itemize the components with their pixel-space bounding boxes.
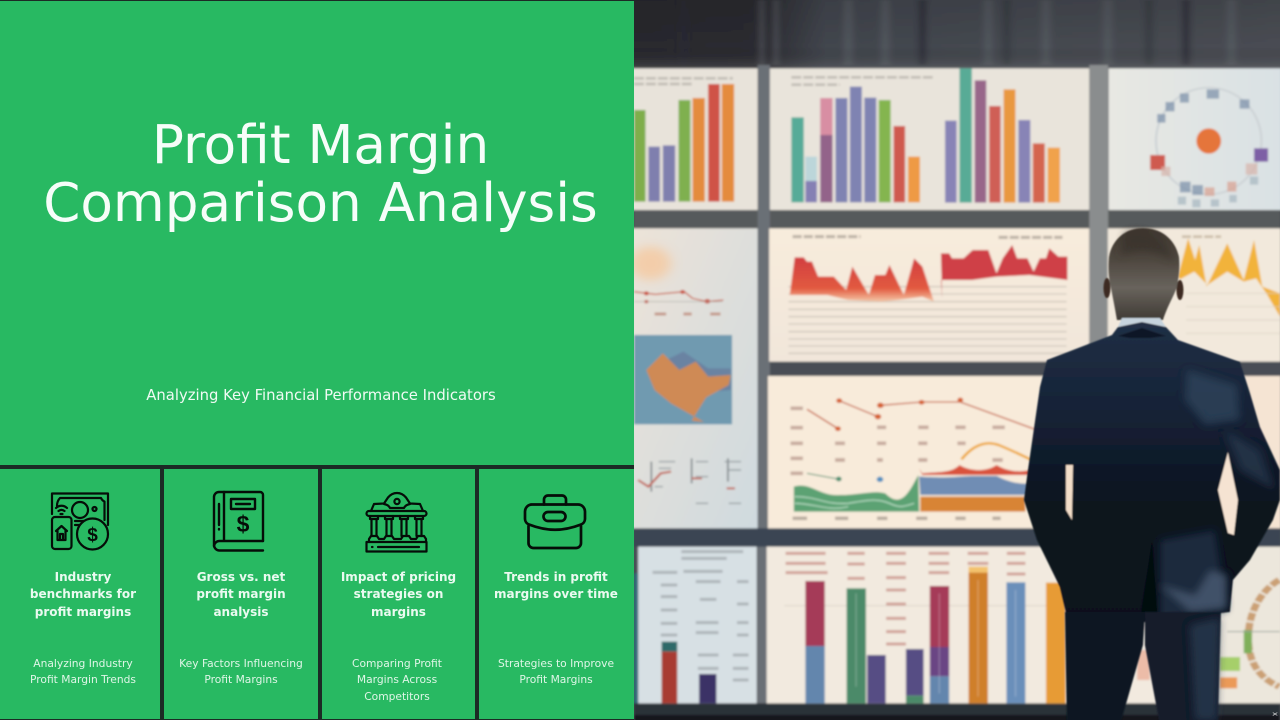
third row line and stacked area chart panel [768, 376, 1089, 528]
card text [179, 657, 303, 686]
panel: title area [0, 0, 634, 720]
ears [1103, 278, 1183, 300]
title: Comparison Analysis [43, 172, 598, 234]
card text: Margins Across [357, 673, 437, 686]
card text: Profit Margins [519, 673, 593, 686]
bottom left table panel [634, 547, 757, 703]
middle centre red area chart panel [769, 228, 1089, 362]
middle right yellow line chart panel [1108, 228, 1280, 362]
collar [1118, 318, 1166, 327]
card heading: analysis [213, 605, 269, 619]
card text: Profit Margin Trends [30, 673, 136, 686]
icon: classical bank building [365, 492, 428, 553]
subtitle: Analyzing Key Financial Performance Indicators [146, 387, 496, 404]
photo: businessman viewing wall of charts [634, 0, 1280, 720]
card text: Key Factors Influencing [179, 657, 303, 670]
card heading [494, 570, 618, 601]
card heading: profit margins [35, 605, 131, 619]
bottom centre bar chart panel [767, 547, 1220, 703]
top right radial chart panel [1109, 68, 1280, 210]
card text: Comparing Profit [352, 657, 442, 670]
wall and panels background [630, 0, 1280, 720]
card heading [30, 570, 136, 619]
card heading: strategies on [354, 587, 443, 601]
panel: pricing strategies card [341, 492, 456, 703]
head and hair [1109, 228, 1179, 320]
bottom right radial chart panel [1220, 547, 1280, 703]
man in dark suit seen from behind [1024, 228, 1280, 720]
middle left panel with small line chart and map [630, 228, 758, 528]
card heading [196, 570, 286, 619]
title [43, 114, 598, 234]
card text [498, 657, 614, 686]
card text [352, 657, 442, 703]
third row right panel [1219, 376, 1280, 528]
card text [30, 657, 136, 686]
card heading: margins over time [494, 587, 618, 601]
suit jacket and arms [1024, 322, 1280, 622]
tiny corner mark: × [1272, 710, 1279, 718]
card text: Profit Margins [204, 673, 278, 686]
card heading: margins [371, 605, 426, 619]
panel: trends card [494, 494, 618, 686]
card heading: benchmarks for [30, 587, 136, 601]
card heading: Trends in profit [504, 570, 608, 584]
top left bar chart panel [632, 68, 758, 210]
icon: briefcase [524, 494, 586, 550]
card heading: Gross vs. net [197, 570, 285, 584]
panel: industry benchmarks card [30, 492, 136, 686]
icon: money, phone and coin: $ [87, 525, 98, 546]
icon: money, phone and coin [50, 492, 110, 551]
icon: ledger book with dollar: $ [237, 511, 250, 537]
card heading: Impact of pricing [341, 570, 456, 584]
icon: ledger book with dollar [212, 490, 264, 552]
trousers [1065, 612, 1221, 720]
card text: Strategies to Improve [498, 657, 614, 670]
card heading: profit margin [196, 587, 286, 601]
card text: Analyzing Industry [33, 657, 133, 670]
top centre bar chart panel [770, 68, 1089, 210]
card heading: Industry [55, 570, 111, 584]
panel: gross vs net card [179, 490, 303, 686]
card text: Competitors [364, 690, 430, 703]
title: Profit Margin [152, 114, 489, 176]
card heading [341, 570, 456, 619]
